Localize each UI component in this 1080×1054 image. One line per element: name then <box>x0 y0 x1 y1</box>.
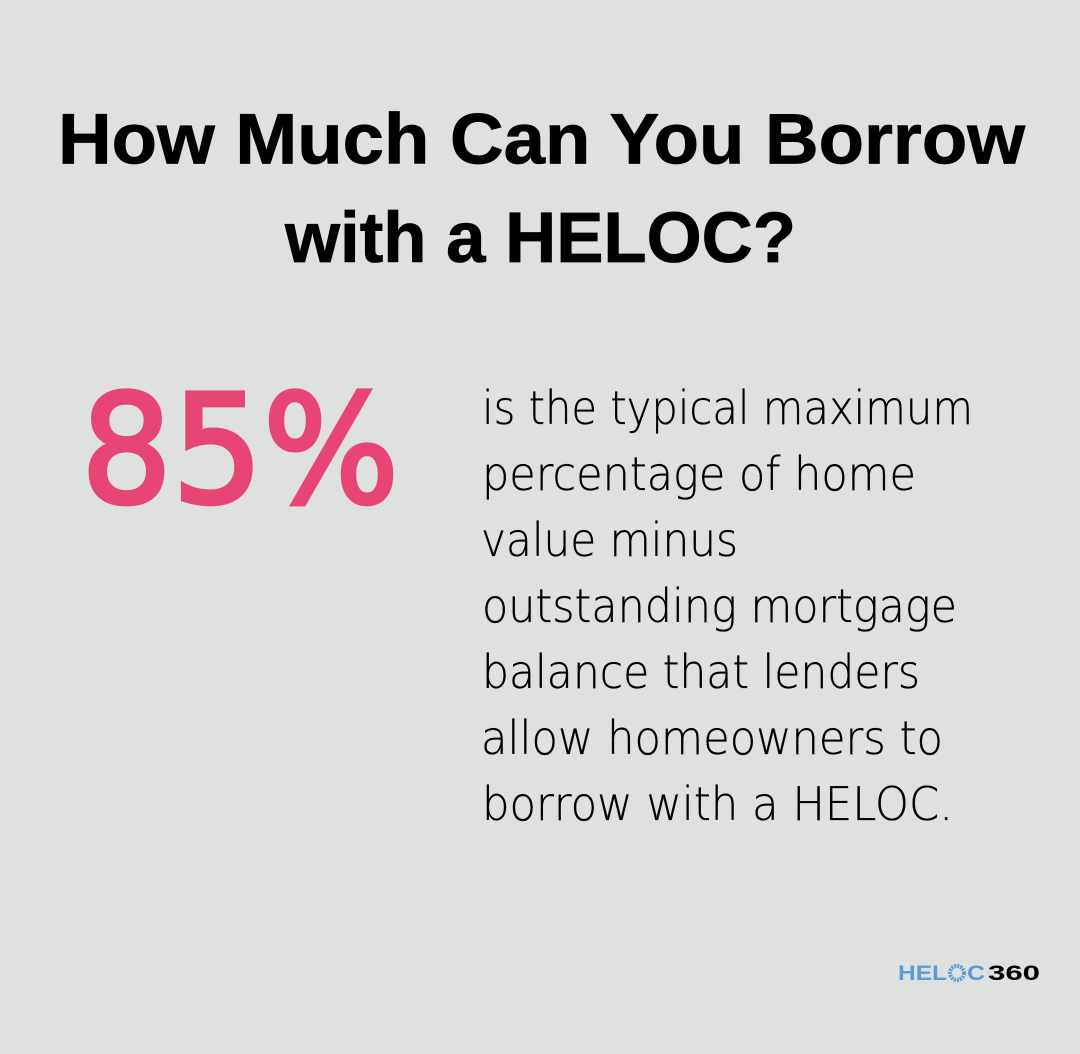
description text: percentage of home <box>482 447 916 501</box>
description text: balance that lenders <box>482 645 920 699</box>
title <box>58 100 1026 278</box>
description text <box>481 381 973 831</box>
logo: HELOC360: HEL <box>898 962 947 985</box>
logo: HELOC360: 360 <box>988 962 1040 985</box>
description text: borrow with a HELOC. <box>482 777 953 831</box>
description text: outstanding mortgage <box>482 579 957 633</box>
logo: HELOC360: C <box>967 962 985 985</box>
logo: HELOC360 <box>898 962 1040 985</box>
title: How Much Can You Borrow <box>58 100 1026 180</box>
description text: is the typical maximum <box>482 381 973 435</box>
description text: value minus <box>481 513 738 567</box>
big statistic: 85%: 85% <box>81 364 399 538</box>
description text: allow homeowners to <box>481 711 943 765</box>
title: with a HELOC? <box>284 199 796 278</box>
